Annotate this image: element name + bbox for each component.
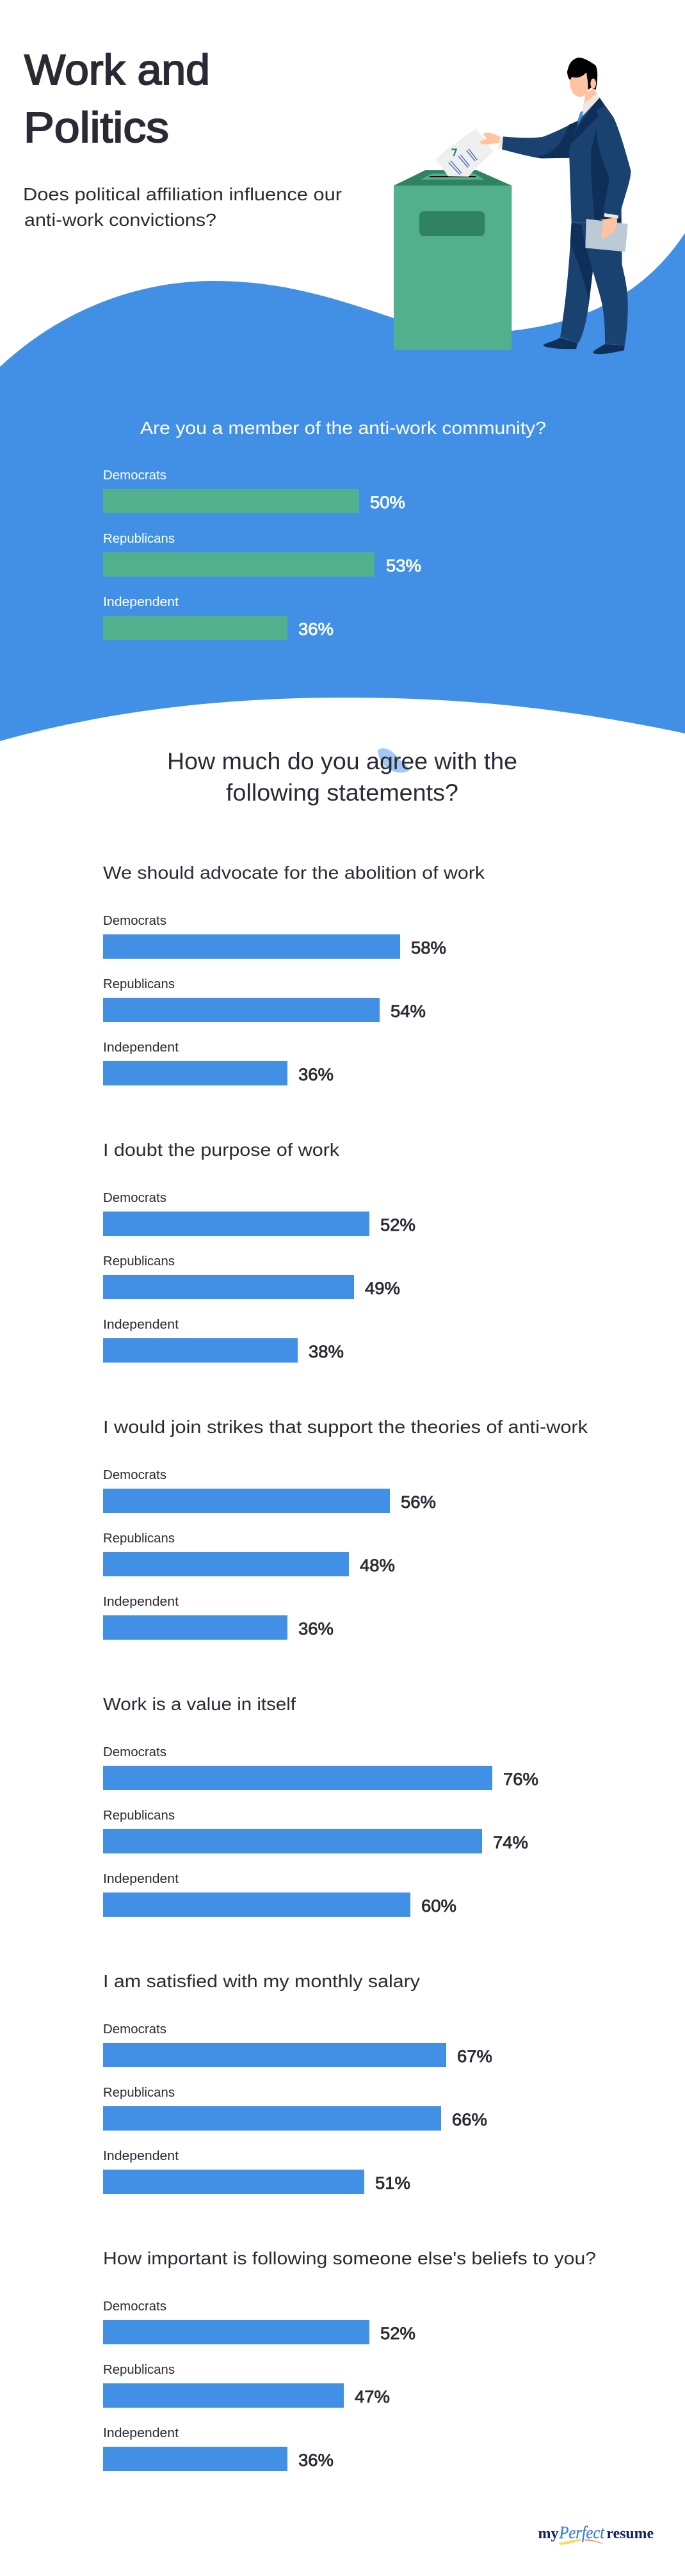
bar chart: community membership: 53% — [386, 556, 421, 575]
panel: doubt the purpose of work: I doubt the purpose of work — [103, 1140, 340, 1160]
bar chart: community membership: 36% — [298, 620, 334, 639]
title: Work and — [24, 46, 210, 94]
panel: satisfied with salary — [103, 1971, 492, 2194]
panel: work is a value: 60% — [421, 1896, 456, 1916]
panel: satisfied with salary: 51% — [375, 2173, 410, 2193]
decorative blob behind heading — [378, 748, 410, 772]
panel: work is a value: Democrats — [103, 1745, 166, 1759]
panel: join strikes — [103, 1417, 588, 1640]
heading: statements — [167, 748, 517, 806]
heading: anti-work community: Are you a member of the anti-work community? — [140, 418, 546, 438]
panel: join strikes: 36% — [298, 1619, 334, 1638]
panel: following beliefs: Republicans — [103, 2363, 175, 2377]
panel: doubt the purpose of work: Democrats — [103, 1191, 166, 1205]
panel: following beliefs: Democrats — [103, 2300, 166, 2314]
panel: following beliefs: 52% — [380, 2324, 415, 2343]
panel: work is a value: Work is a value in itself — [103, 1694, 296, 1714]
panel: advocate for abolition of work: Republicans — [103, 977, 175, 991]
panel: satisfied with salary: I am satisfied with my monthly salary — [103, 1971, 420, 1991]
panel: join strikes: 48% — [360, 1556, 395, 1575]
panel: doubt the purpose of work: 38% — [309, 1342, 344, 1361]
panel: satisfied with salary: Republicans — [103, 2086, 175, 2100]
panel: join strikes: Independent — [103, 1595, 179, 1609]
logo: myPerfectResume: my — [538, 2525, 558, 2542]
illustration: voter — [479, 58, 631, 354]
title — [24, 46, 210, 152]
heading: statements: following statements? — [226, 780, 458, 806]
panel: advocate for abolition of work: Independent — [103, 1041, 179, 1055]
panel: work is a value: 76% — [503, 1770, 538, 1789]
subtitle: anti-work convictions? — [24, 210, 216, 230]
panel: following beliefs: 36% — [298, 2451, 334, 2470]
panel: doubt the purpose of work — [103, 1140, 415, 1363]
blue wave background — [0, 233, 685, 741]
logo: myPerfectResume: Perfect — [559, 2523, 605, 2542]
panel: advocate for abolition of work: Democrats — [103, 914, 166, 928]
panel: work is a value — [103, 1694, 538, 1917]
panel: work is a value: Republicans — [103, 1809, 175, 1823]
panel: doubt the purpose of work: 52% — [380, 1215, 415, 1235]
panel: following beliefs: Independent — [103, 2426, 179, 2440]
logo: myPerfectResume: resume — [607, 2525, 654, 2542]
bar chart: community membership: Democrats — [103, 468, 166, 483]
panel: satisfied with salary: Democrats — [103, 2022, 166, 2036]
heading: statements: How much do you agree with the — [167, 748, 517, 774]
panel: advocate for abolition of work: 58% — [411, 938, 446, 957]
bar chart: community membership: Republicans — [103, 532, 175, 546]
panel: advocate for abolition of work: 54% — [391, 1002, 426, 1021]
panel: satisfied with salary: 66% — [452, 2110, 487, 2129]
panel: join strikes: Republicans — [103, 1532, 175, 1546]
subtitle: Does political affiliation influence our — [23, 184, 342, 204]
panel: following beliefs — [103, 2248, 596, 2471]
panel: doubt the purpose of work: 49% — [365, 1279, 400, 1298]
panel: join strikes: 56% — [401, 1492, 436, 1512]
panel: join strikes: Democrats — [103, 1468, 166, 1482]
panel: satisfied with salary: Independent — [103, 2149, 179, 2163]
bar chart: community membership: 50% — [370, 493, 405, 512]
panel: advocate for abolition of work — [103, 863, 485, 1085]
panel: work is a value: 74% — [493, 1833, 528, 1852]
panel: doubt the purpose of work: Independent — [103, 1318, 179, 1332]
bar chart: community membership: Independent — [103, 595, 179, 609]
panel: advocate for abolition of work: We should advocate for the abolition of work — [103, 863, 485, 883]
illustration: ballot paper — [435, 129, 494, 177]
bar chart: community membership — [103, 468, 421, 640]
panel: following beliefs: How important is following someone else's beliefs to you? — [103, 2248, 596, 2268]
subtitle — [23, 184, 342, 230]
panel: doubt the purpose of work: Republicans — [103, 1254, 175, 1268]
logo: myPerfectResume — [538, 2523, 654, 2545]
panel: following beliefs: 47% — [355, 2387, 390, 2406]
illustration: ballot box — [394, 170, 512, 350]
panel: satisfied with salary: 67% — [457, 2047, 492, 2066]
panel: join strikes: I would join strikes that support the theories of anti-work — [103, 1417, 588, 1437]
title: Politics — [24, 104, 169, 152]
panel: work is a value: Independent — [103, 1872, 179, 1886]
panel: advocate for abolition of work: 36% — [298, 1065, 334, 1084]
